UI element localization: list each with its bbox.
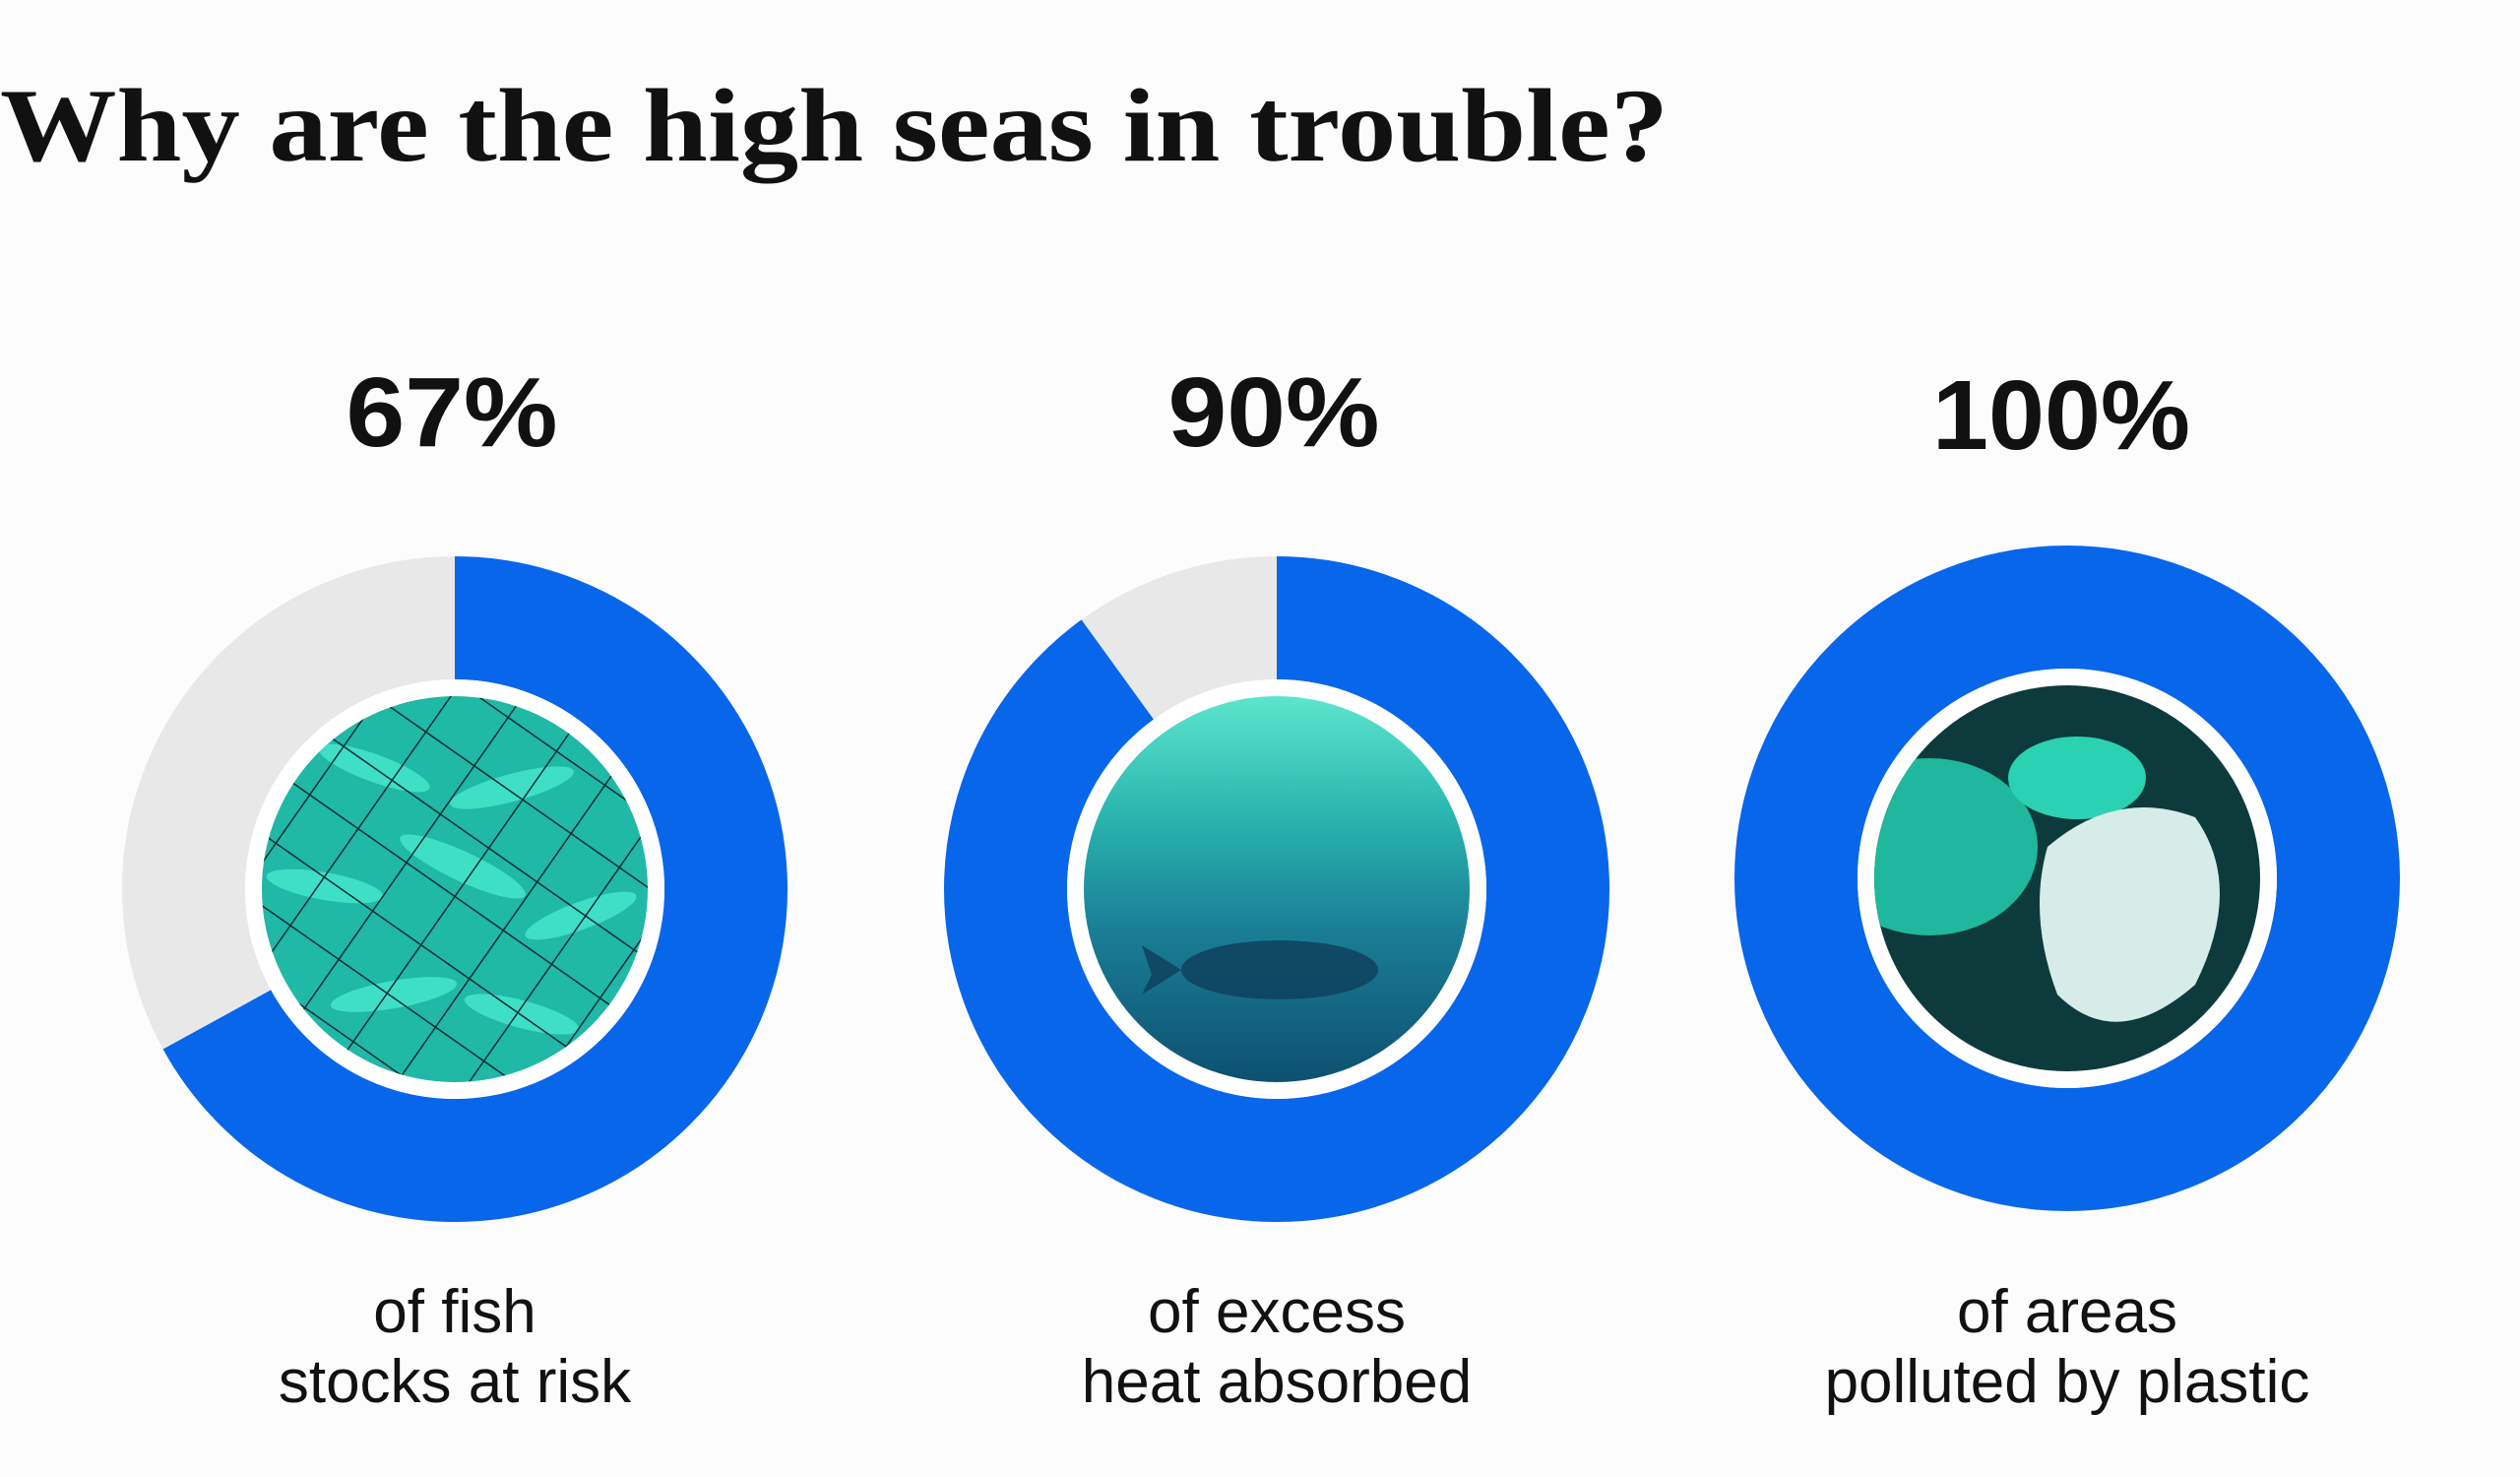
label: heat: of excess <box>1148 1278 1406 1346</box>
percent: 67%: 67% <box>346 357 557 468</box>
percent: 90%: 90% <box>1167 357 1380 468</box>
title: Why are the high seas in trouble? <box>0 68 1669 183</box>
donut chart: 67% <box>183 618 726 1160</box>
panel: fish stocks <box>183 357 726 1160</box>
illustration: turtle and plastic bag <box>1874 685 2260 1071</box>
illustration: ocean with whale <box>1080 692 1474 1086</box>
percent: 100%: 100% <box>1932 360 2190 471</box>
label: plastic: polluted by plastic <box>1825 1348 2309 1416</box>
label: fish: stocks at risk <box>279 1348 632 1416</box>
label: heat: heat absorbed <box>1082 1348 1472 1416</box>
label: fish: of fish <box>373 1278 536 1346</box>
donut chart: 90% <box>1006 618 1547 1160</box>
illustration: fish in net <box>258 692 652 1086</box>
panel: plastic <box>1796 360 2339 1150</box>
panel: excess heat <box>1006 357 1547 1160</box>
donut chart: 100% <box>1796 607 2339 1150</box>
label: plastic: of areas <box>1957 1278 2177 1346</box>
